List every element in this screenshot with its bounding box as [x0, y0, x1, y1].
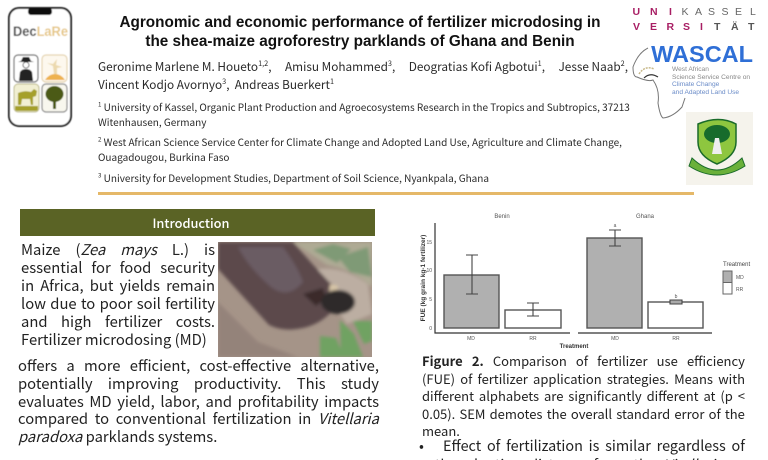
intro lines below photo: in [298, 408, 311, 429]
error bars [466, 230, 682, 316]
figure caption: Comparison [493, 351, 567, 370]
intro lines beside photo: security [160, 257, 215, 278]
figure caption: with [718, 368, 745, 388]
figure caption: of [460, 368, 472, 388]
bullet: fertilization effect: of [487, 435, 500, 456]
intro lines below photo: productivity. [194, 373, 281, 394]
intro lines beside photo: poor [100, 293, 132, 314]
chart: FUE bar chart: RR [529, 336, 537, 342]
intro lines below photo: compared [18, 408, 88, 429]
figure caption: are [544, 386, 563, 405]
logo: Uni Kassel: UNI [632, 6, 672, 18]
title: Agronomic and economic performance of fertilizer microdosing in [119, 14, 601, 31]
intro lines beside photo: due [50, 293, 77, 314]
figure caption: 0.05). [422, 404, 455, 422]
intro lines below photo: cost-effective [199, 355, 291, 376]
authors: Jesse Naab2, [558, 58, 628, 75]
intro lines beside photo: to [81, 293, 95, 314]
figure caption: efficiency [687, 351, 745, 370]
intro lines below photo: a [66, 355, 75, 376]
heading: Introduction [20, 209, 375, 236]
legend: Treatment [723, 262, 750, 268]
intro lines below photo: conventional [116, 408, 206, 429]
intro lines beside photo: but [90, 275, 113, 296]
intro lines beside photo: and [21, 311, 48, 332]
intro lines beside photo: Maize [21, 239, 60, 260]
authors [98, 58, 628, 92]
logo: Uni Kassel: TÄT [714, 20, 755, 33]
authors: Geronime Marlene M. Houeto1,2, [98, 58, 272, 75]
chart: FUE bar chart: 10 [426, 268, 432, 274]
bullet: fertilization effect [419, 435, 746, 460]
authors: Amisu Mohammed3, [285, 58, 395, 75]
photo: microdosing by hand [218, 242, 372, 357]
chart: FUE bar chart: Treatment [560, 344, 588, 350]
intro lines beside photo: mays [120, 239, 157, 260]
bullet: fertilization effect: is [589, 435, 599, 456]
figure caption: Means [674, 368, 713, 388]
intro lines below photo: paradoxa parklands systems. [18, 426, 217, 447]
affiliations: 1 University of Kassel, Organic Plant Production and Agroecosystems Research in the Tropics and Subtropics, 37213 [98, 98, 630, 114]
bullet: fertilization effect: Effect [443, 435, 481, 456]
figure caption: alphabets [479, 386, 539, 405]
intro lines beside photo: for [91, 257, 111, 278]
bullet: fertilization effect: regardless [657, 435, 726, 456]
intro lines beside photo [21, 239, 215, 350]
logo: WASCAL: West African [672, 66, 709, 73]
heading: Introduction: Introduction [152, 213, 230, 232]
chart: FUE bar chart: RR [736, 287, 744, 293]
figure caption: different [422, 386, 474, 405]
intro lines below photo: evaluates [18, 391, 84, 412]
figure caption: fertilizer [477, 368, 528, 388]
chart: FUE bar chart: b [675, 294, 678, 300]
intro lines below photo: impacts [324, 391, 379, 412]
chart: FUE bar chart: Ghana [636, 214, 655, 220]
figure caption: SEM [459, 404, 485, 422]
logo: WASCAL: Science Service Centre on [672, 74, 750, 81]
affiliations: Witenhausen, Germany [98, 114, 206, 128]
intro lines below photo: offers [18, 355, 57, 376]
intro lines beside photo: fertilizer [105, 311, 162, 332]
figure caption: Figure [422, 351, 463, 370]
intro lines beside photo: Fertilizer microdosing (MD) [21, 329, 207, 350]
chart: FUE bar chart: FUE (kg grain kg-1 fertilizer) [420, 235, 427, 321]
bullet: fertilization effect: fertilization [506, 435, 583, 456]
figure caption: demotes [490, 404, 543, 422]
intro lines below photo [18, 355, 380, 447]
chart: FUE bar chart: a [614, 223, 617, 229]
figure caption: overall [571, 404, 612, 422]
bullet: fertilization effect: similar [605, 435, 651, 456]
title: the shea-maize agroforestry parklands of Ghana and Benin [145, 33, 575, 50]
logo: DecLaRe phone [7, 6, 73, 128]
chart: FUE bar chart: MD [736, 275, 744, 281]
intro lines below photo: fertilization [213, 408, 292, 429]
bullet: fertilization effect: of [732, 435, 745, 456]
logo: UDS crest [686, 112, 753, 185]
figure caption: < [738, 386, 745, 405]
chart: FUE bar chart: 5 [429, 297, 432, 303]
intro lines beside photo: yields [120, 275, 160, 296]
affiliations [98, 98, 630, 184]
figure caption: application [533, 368, 602, 388]
figure caption: (FUE) [422, 368, 455, 388]
authors: Deogratias Kofi Agbotui1, [409, 58, 545, 75]
figure caption: fertilizer [597, 351, 648, 370]
chart: FUE bar chart: 0 [429, 326, 432, 332]
intro lines beside photo: is [204, 239, 215, 260]
figure caption: (p [720, 386, 733, 405]
chart: FUE bar chart: MD [467, 336, 475, 342]
intro lines beside photo: L.) [172, 239, 189, 260]
figure caption: of [709, 404, 721, 422]
intro lines beside photo: remain [166, 275, 215, 296]
intro lines beside photo: soil [137, 293, 161, 314]
intro lines below photo: profitability [238, 391, 319, 412]
text: introduction [18, 239, 380, 447]
affiliations: 2 West African Science Service Center for Climate Change and Adopted Land Use, Agriculture and Climate Change, [98, 134, 622, 148]
logo: Uni Kassel: VERSI [633, 21, 703, 33]
authors: Vincent Kodjo Avornyo3, Andreas Buerkert1 [98, 76, 334, 92]
chart: FUE bar chart: 15 [426, 240, 432, 246]
intro lines below photo: MD [89, 391, 112, 412]
logo: DecLaRe phone: DecLaRe [13, 24, 68, 39]
intro lines beside photo: essential [21, 257, 82, 278]
intro lines below photo: yield, [117, 391, 155, 412]
intro lines below photo: alternative, [300, 355, 379, 376]
intro lines below photo: potentially [18, 373, 93, 394]
logo: WASCAL: Climate Change [672, 81, 719, 88]
figure caption: standard [616, 404, 670, 422]
figure caption: the [725, 404, 745, 422]
intro lines below photo: efficient, [130, 355, 190, 376]
figure caption [422, 351, 745, 440]
title [119, 14, 601, 50]
intro lines beside photo: Africa, [40, 275, 84, 296]
figure caption: strategies. [607, 368, 669, 388]
figure caption: 2. [472, 351, 484, 370]
chart: FUE bar chart: RR [672, 336, 680, 342]
logo: Uni Kassel [632, 6, 756, 33]
figure caption: the [547, 404, 567, 422]
intro lines below photo: to [95, 408, 109, 429]
intro lines below photo: Vitellaria [318, 408, 379, 429]
logo: WASCAL: and Adapted Land Use [672, 89, 739, 96]
figure caption: different [647, 386, 699, 405]
figure caption: of [576, 351, 588, 370]
figure caption: mean. [422, 421, 460, 440]
intro lines beside photo: costs. [176, 311, 215, 332]
chart: FUE bar chart: MD [611, 336, 619, 342]
bars [444, 238, 703, 328]
bullet: fertilization effect: • [419, 435, 424, 456]
figure caption: significantly [568, 386, 642, 405]
intro lines beside photo: (Zea [75, 239, 105, 260]
intro lines below photo: improving [108, 373, 178, 394]
divider [98, 192, 694, 195]
intro lines below photo: labor, [160, 391, 200, 412]
affiliations: 3 University for Development Studies, Department of Soil Science, Nyankpala, Ghana [98, 170, 489, 184]
intro lines beside photo: low [21, 293, 46, 314]
intro lines beside photo: in [21, 275, 34, 296]
chart: FUE bar chart: Benin [494, 214, 510, 220]
intro lines beside photo: high [61, 311, 91, 332]
intro lines below photo: more [84, 355, 120, 376]
figure caption: at [703, 386, 715, 405]
logo: WASCAL [632, 41, 753, 118]
figure caption: use [657, 351, 678, 370]
chart: FUE bar chart [420, 214, 750, 350]
intro lines beside photo: fertility [165, 293, 215, 314]
logo: Uni Kassel: KASSEL [682, 6, 756, 18]
intro lines below photo: This [297, 373, 326, 394]
intro lines beside photo: food [120, 257, 151, 278]
affiliations: Ouagadougou, Burkina Faso [98, 148, 229, 164]
figure caption: error [674, 404, 704, 422]
intro lines below photo: study [341, 373, 379, 394]
intro lines below photo: and [206, 391, 232, 412]
logo: WASCAL: WASCAL [651, 41, 753, 67]
